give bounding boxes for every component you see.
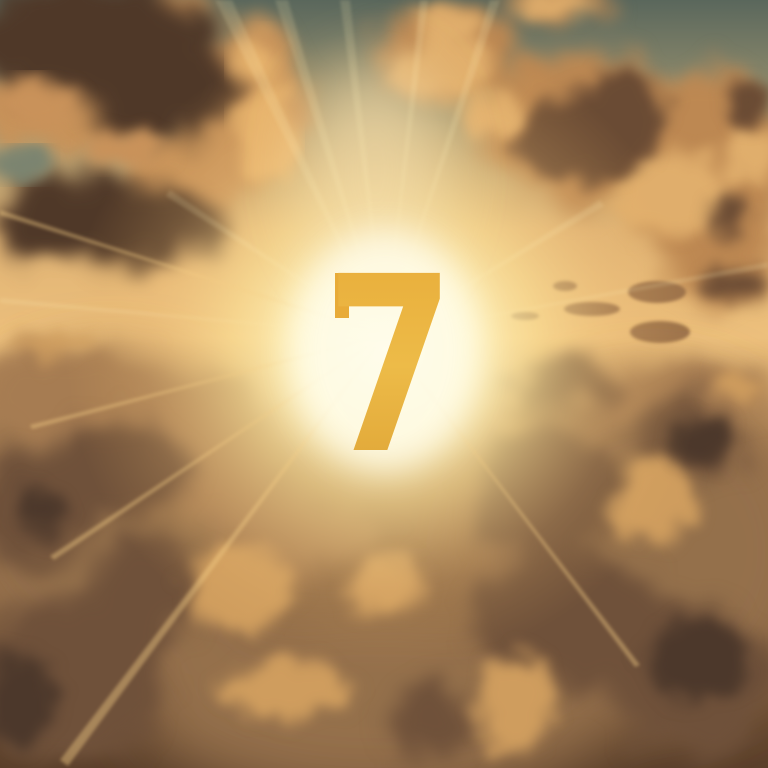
upper left cloud mass — [0, 0, 308, 267]
golden numeral 7: 7 — [326, 225, 454, 507]
small distant clouds — [511, 281, 690, 343]
upper sky haze — [305, 60, 445, 280]
highlight core behind numeral — [290, 230, 480, 470]
upper right cloud mass — [380, 0, 768, 305]
central sun glow — [65, 30, 705, 670]
lower cloud sea — [0, 336, 768, 768]
teal sky patch — [0, 147, 54, 183]
